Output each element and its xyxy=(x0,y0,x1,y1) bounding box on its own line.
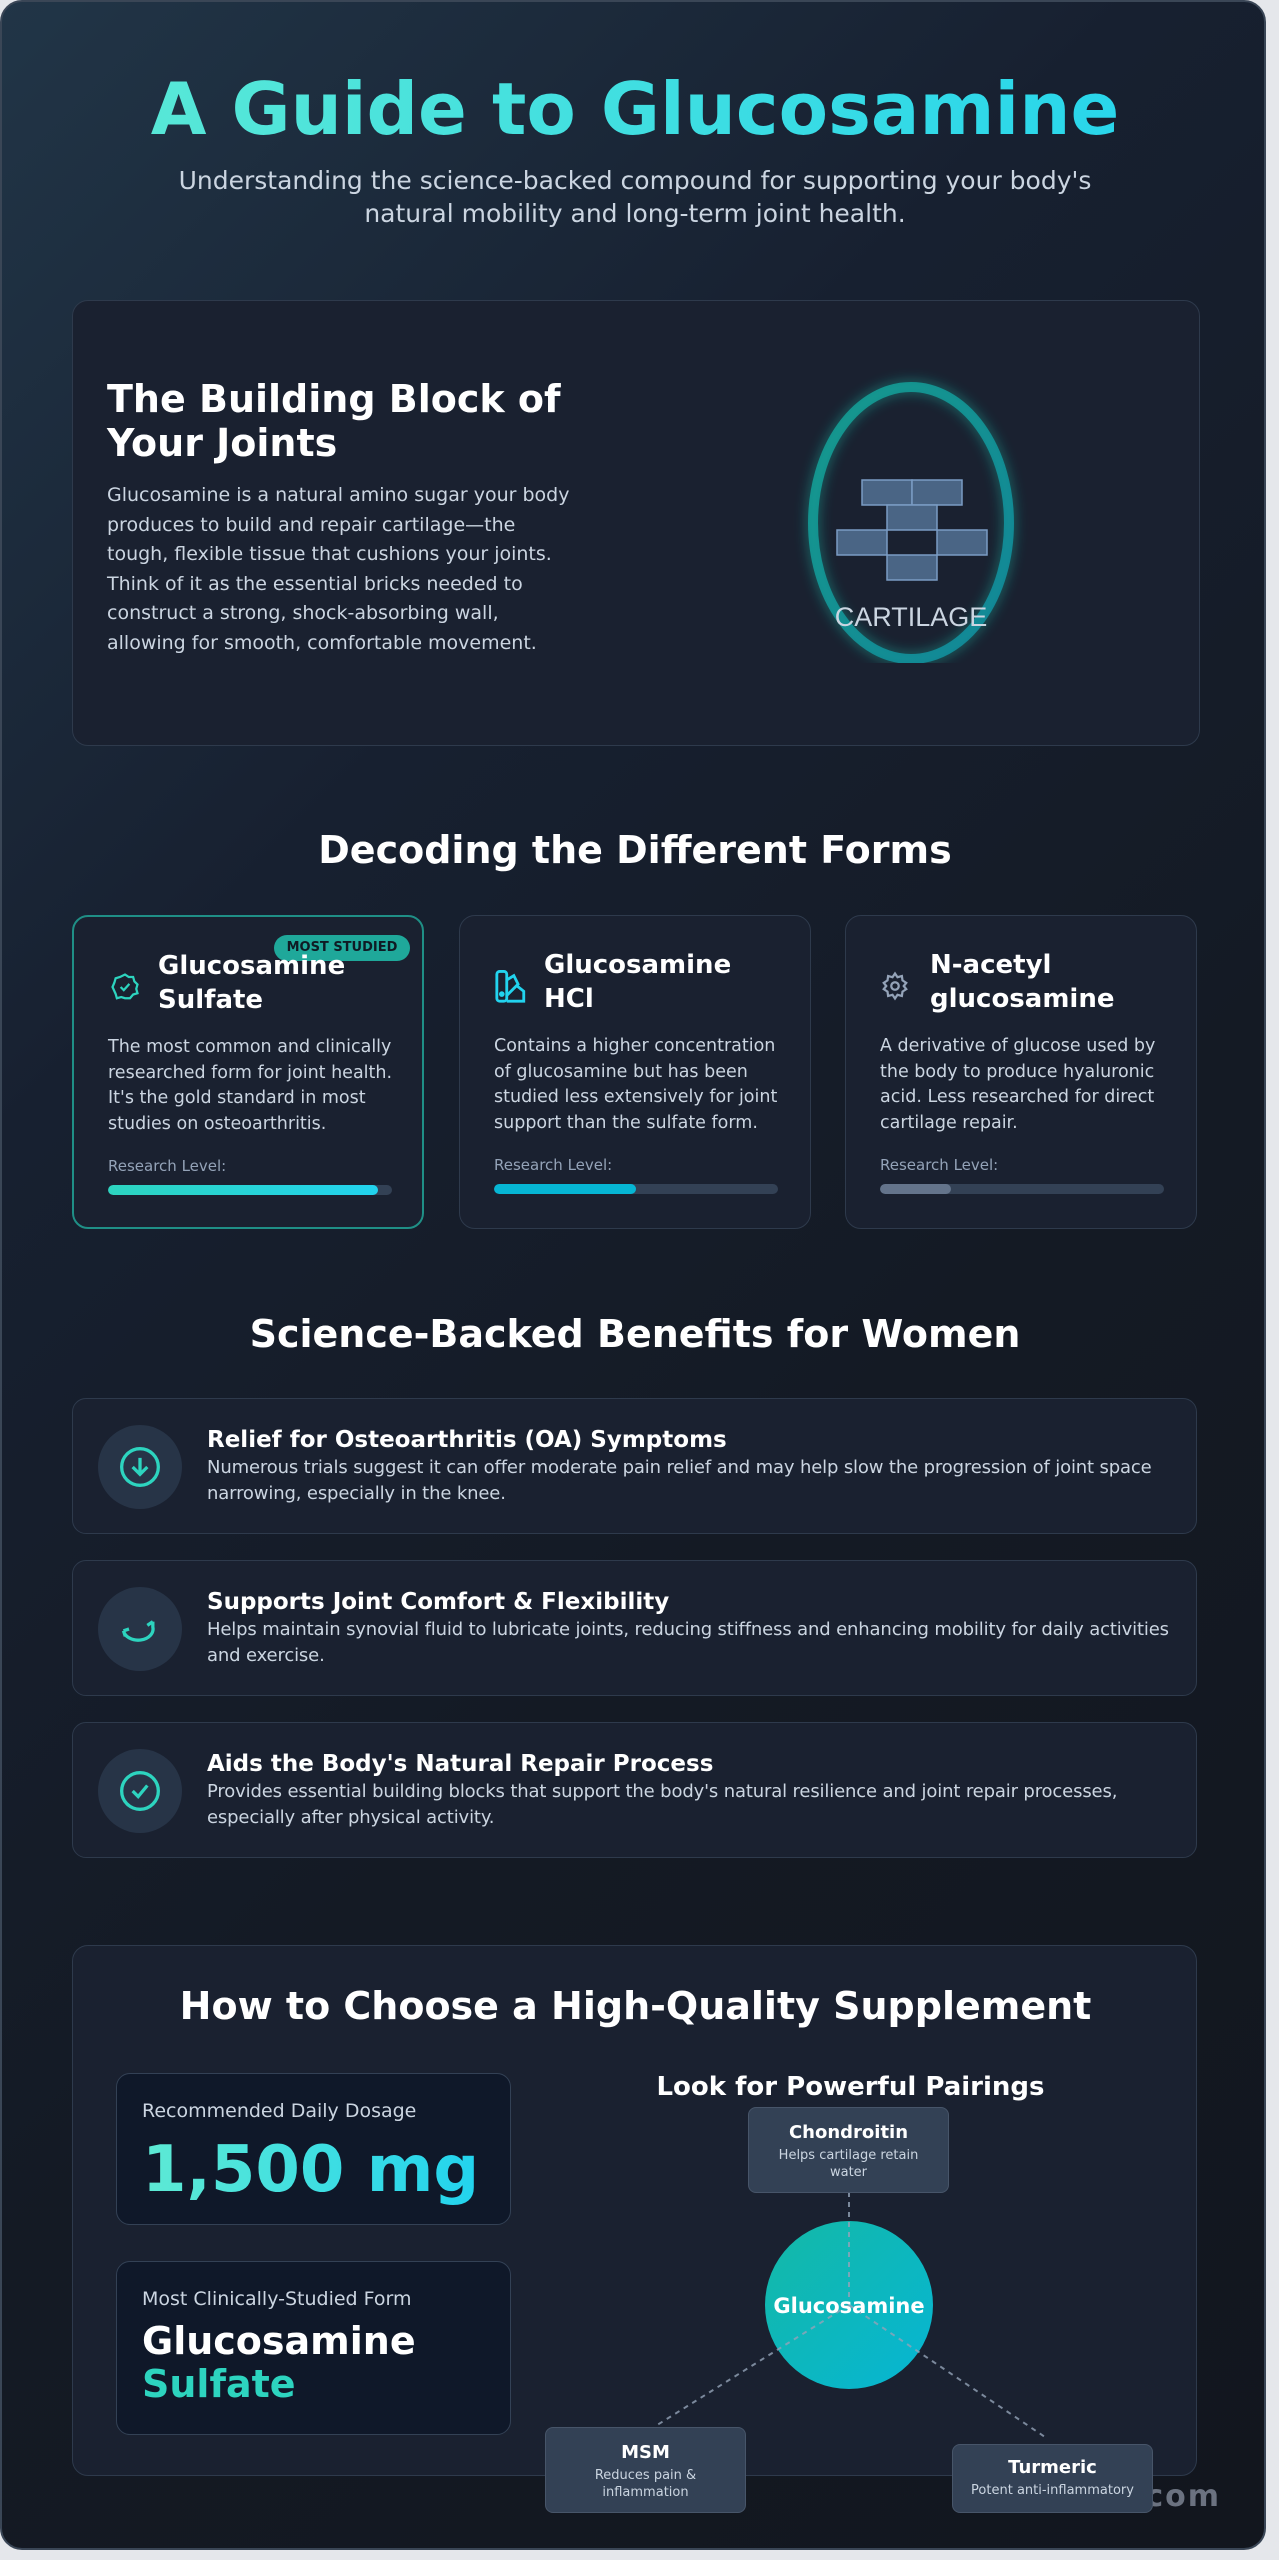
card: dosage xyxy=(116,2073,511,2225)
card: glucosamine hcl: Contains a higher concentration of glucosamine but has been studied less extensively for joint support than the sulfate form. xyxy=(494,1036,777,1132)
icon: cartilage bricks: CARTILAGE xyxy=(835,602,987,632)
heading: benefits: Science-Backed Benefits for Women xyxy=(250,1312,1020,1356)
benefit: osteoarthritis relief: Relief for Osteoarthritis (OA) Symptoms xyxy=(207,1427,727,1453)
text: building block description: Glucosamine is a natural amino sugar your body produces to build and repair cartilage—the tough, flexible tissue that cushions your joints. Think of it as the essential bricks needed to construct a strong, shock-absorbing wall, allowing for smooth, comfortable movement. xyxy=(107,484,569,654)
card: n-acetyl glucosamine: A derivative of glucose used by the body to produce hyaluronic acid. Less researched for direct cartilage repair. xyxy=(880,1036,1155,1132)
card: n-acetyl glucosamine: Research Level: xyxy=(880,1156,998,1174)
heading: choose supplement: How to Choose a High-Quality Supplement xyxy=(180,1984,1091,2028)
benefit: natural repair: Provides essential building blocks that support the body's natural resilience and joint repair processes, especially after physical activity. xyxy=(207,1781,1117,1828)
box: chondroitin xyxy=(748,2107,949,2193)
card: glucosamine sulfate: Glucosamine Sulfate xyxy=(158,951,345,1015)
card: clinically studied form xyxy=(116,2261,511,2435)
diagram: pairings xyxy=(658,2193,1044,2437)
card: clinically studied form: Sulfate xyxy=(142,2362,296,2406)
card: clinically studied form: Most Clinically-Studied Form xyxy=(142,2288,412,2310)
box: msm: Reduces pain & inflammation xyxy=(595,2468,696,2500)
heading: pairings: Look for Powerful Pairings xyxy=(656,2072,1044,2102)
card: glucosamine hcl xyxy=(459,915,811,1229)
box: turmeric xyxy=(952,2444,1153,2513)
benefit: joint comfort: Supports Joint Comfort & Flexibility xyxy=(207,1589,669,1615)
card: glucosamine sulfate xyxy=(72,915,424,1229)
box: msm: MSM xyxy=(621,2442,670,2463)
title: A Guide to Glucosamine xyxy=(151,67,1119,151)
benefit: natural repair: Aids the Body's Natural Repair Process xyxy=(207,1751,713,1777)
benefit: osteoarthritis relief xyxy=(72,1398,1197,1534)
box: turmeric: Potent anti-inflammatory xyxy=(971,2483,1134,2498)
benefit: osteoarthritis relief: Numerous trials suggest it can offer moderate pain relief and may help slow the progression of joint space narrowing, especially in the knee. xyxy=(207,1457,1152,1504)
box: turmeric: Turmeric xyxy=(1008,2457,1097,2478)
box: chondroitin: Helps cartilage retain water xyxy=(779,2148,918,2180)
card: glucosamine sulfate: Research Level: xyxy=(108,1157,226,1175)
panel: building block xyxy=(72,300,1200,746)
diagram: pairings: Glucosamine xyxy=(773,2294,925,2318)
bar: research level high xyxy=(108,1185,392,1195)
benefit: natural repair xyxy=(72,1722,1197,1858)
benefit: joint comfort: Helps maintain synovial fluid to lubricate joints, reducing stiffness and enhancing mobility for daily activities and exercise. xyxy=(207,1619,1169,1666)
icon: swatch xyxy=(495,970,526,1003)
panel: choosing supplement xyxy=(72,1945,1197,2476)
icon: cartilage bricks xyxy=(800,374,1022,663)
card: dosage: 1,500 mg xyxy=(142,2133,479,2207)
icon: flex arrow xyxy=(98,1587,182,1671)
benefit: joint comfort xyxy=(72,1560,1197,1696)
bar: research level low xyxy=(880,1184,1164,1194)
icon: badge check xyxy=(111,973,139,1000)
card: n-acetyl glucosamine: N-acetyl glucosamine xyxy=(930,950,1114,1014)
bar: research level medium xyxy=(494,1184,778,1194)
subtitle: Understanding the science-backed compound for supporting your body's natural mobility and long-term joint health. xyxy=(179,166,1091,228)
card: glucosamine hcl: Glucosamine HCl xyxy=(544,950,731,1014)
badge: most studied xyxy=(274,935,410,961)
icon: gear xyxy=(882,972,908,1000)
card: glucosamine hcl: Research Level: xyxy=(494,1156,612,1174)
icon: check circle xyxy=(98,1749,182,1833)
badge: most studied: MOST STUDIED xyxy=(287,940,397,955)
heading: building block: The Building Block of Your Joints xyxy=(107,377,561,465)
heading: forms: Decoding the Different Forms xyxy=(318,828,952,872)
box: msm xyxy=(545,2427,746,2513)
icon: down arrow circle xyxy=(98,1425,182,1509)
box: chondroitin: Chondroitin xyxy=(789,2122,908,2143)
footer watermark: .com xyxy=(1132,2479,1221,2514)
card: dosage: Recommended Daily Dosage xyxy=(142,2100,416,2122)
card: clinically studied form: Glucosamine xyxy=(142,2319,416,2363)
card: glucosamine sulfate: The most common and clinically researched form for joint health. It's the gold standard in most studies on osteoarthritis. xyxy=(108,1037,392,1134)
card: n-acetyl glucosamine xyxy=(845,915,1197,1229)
